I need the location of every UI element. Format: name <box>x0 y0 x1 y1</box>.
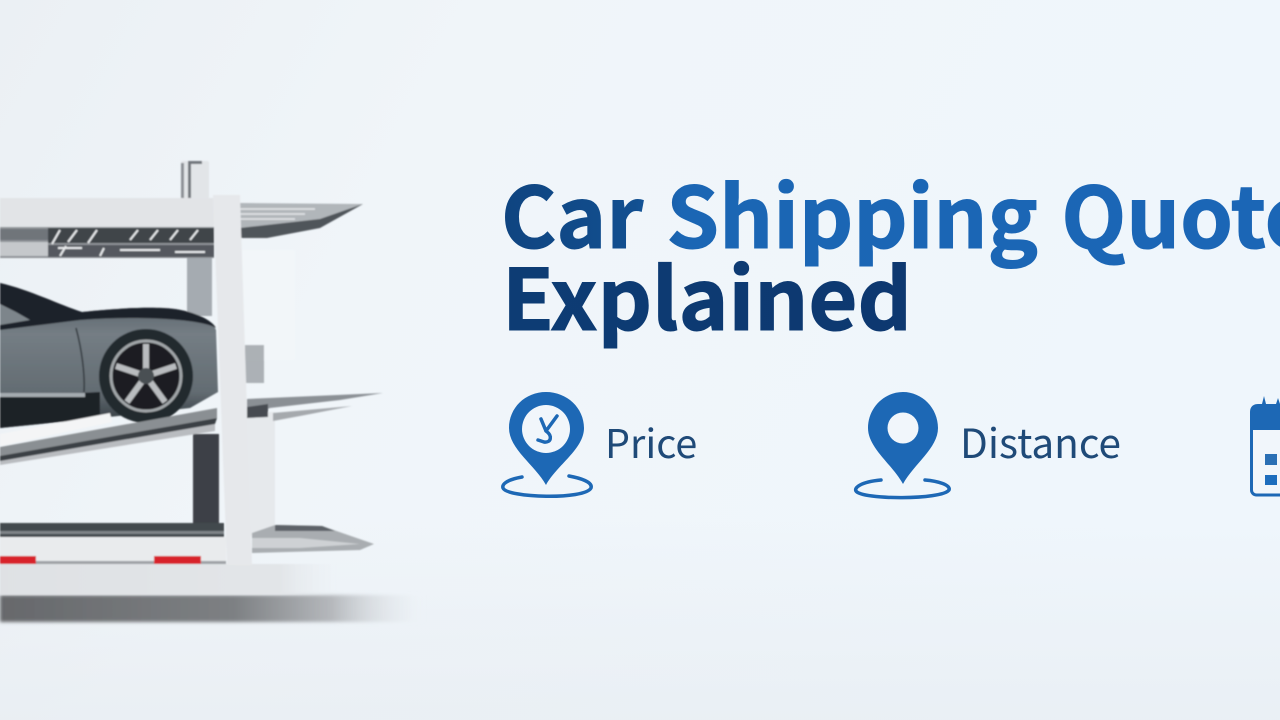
main front post <box>213 195 252 565</box>
top stub post <box>181 161 209 199</box>
lower back post <box>193 434 219 526</box>
lower deck side panel <box>0 537 226 564</box>
car lower sill <box>0 392 100 428</box>
upper deck beam <box>0 198 214 227</box>
icon: calendar <box>1250 396 1280 495</box>
icon: price pin <box>503 392 591 496</box>
door seam <box>76 328 84 392</box>
title <box>501 151 1280 355</box>
icon: location pin <box>856 392 949 498</box>
car roof edge <box>0 283 216 330</box>
car body <box>0 283 218 428</box>
illustration: car carrier trailer with car <box>0 161 425 622</box>
ghost rear panel <box>240 250 295 360</box>
trailer chassis <box>0 564 340 595</box>
lower secondary post <box>247 412 275 536</box>
item: distance <box>856 392 1121 498</box>
car <box>0 283 218 428</box>
middle right ramp <box>247 393 383 421</box>
title line 2: Explained <box>502 233 912 355</box>
car window <box>0 304 30 325</box>
ground shadow <box>0 595 425 622</box>
red marker right <box>154 556 201 564</box>
lower deck dark rail <box>0 523 224 537</box>
mechanical detail by post <box>245 345 264 383</box>
label: price: Price <box>605 413 697 470</box>
upper deck dark rail <box>0 227 214 258</box>
rear wheel <box>99 329 193 423</box>
red marker left <box>0 556 36 564</box>
marker strip <box>0 561 226 564</box>
upper back post <box>187 258 212 316</box>
sloped ramp <box>0 408 217 465</box>
label: distance: Distance <box>960 411 1121 470</box>
bottom right ramp <box>252 525 374 553</box>
item: price <box>503 392 697 496</box>
upper right ramp <box>240 203 363 238</box>
